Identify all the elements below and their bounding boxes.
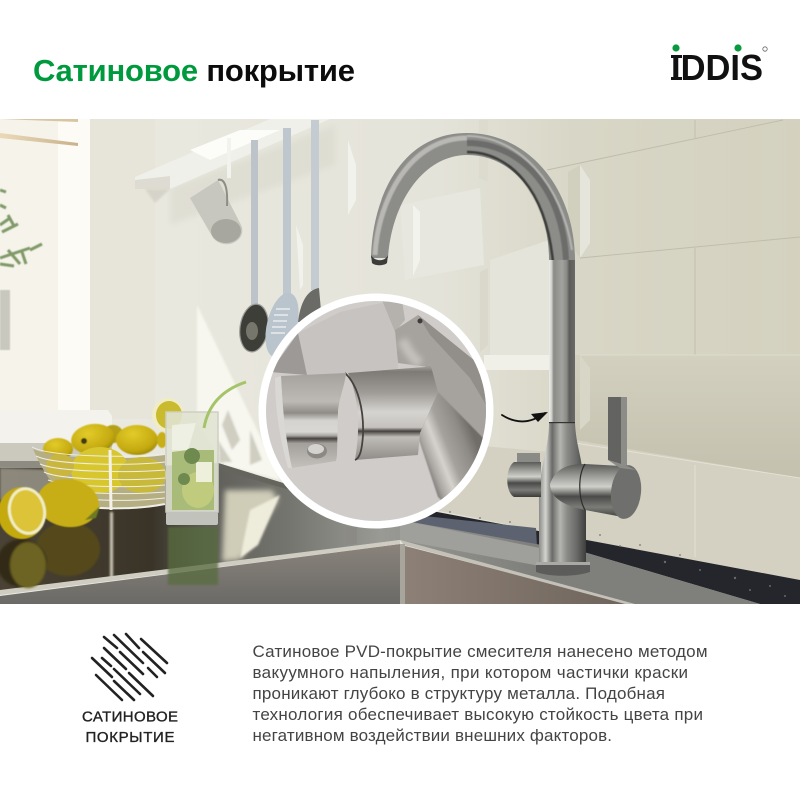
faucet lever handle: [550, 397, 644, 520]
rail: [135, 119, 335, 225]
faucet spout: [371, 133, 575, 425]
countertop: [0, 463, 760, 604]
lemons reflection: [0, 512, 218, 588]
logo: IDDIS: IDDIS: [671, 47, 763, 88]
description text: технология обеспечивает высокую стойкость цвета при: [252, 705, 703, 724]
tiles: left area: [296, 120, 549, 370]
title: Сатиновое покрытие: [33, 53, 355, 88]
description text: [252, 642, 708, 745]
glass of lemonade: [152, 382, 246, 525]
wall background: [0, 119, 800, 604]
description text: Сатиновое PVD-покрытие смесителя нанесено методом: [252, 642, 708, 661]
plant: [0, 190, 42, 350]
photo: kitchen scene: [0, 119, 800, 604]
icon: satin hatching: [92, 634, 167, 700]
description text: негативном воздействии внешних факторов.: [252, 726, 612, 745]
icon caption: ПОКРЫТИЕ: [86, 729, 174, 746]
spoon: [298, 120, 322, 322]
cap: [281, 373, 346, 468]
rivet: [307, 444, 327, 458]
icon caption: САТИНОВОЕ: [82, 708, 178, 726]
upper neck: [382, 300, 495, 500]
sink rim and walls: [0, 540, 635, 604]
mug: [190, 138, 242, 244]
basket with lemons: [32, 421, 167, 510]
body cylinder: [348, 364, 438, 460]
faucet side knob: [507, 453, 541, 497]
zoom circle: [258, 294, 495, 528]
icon caption: [82, 708, 178, 746]
skimmer: [266, 128, 298, 356]
tiles: right wall: [420, 120, 800, 582]
granite backsplash band: [400, 505, 800, 604]
sun patch on wall: [197, 305, 280, 480]
faucet body: [536, 422, 590, 576]
ring: [345, 373, 363, 460]
arrow: [502, 412, 548, 422]
circle background: [260, 300, 495, 525]
description text: проникают глубоко в структуру металла. Подобная: [252, 684, 665, 703]
sill: [0, 410, 112, 469]
front lemons: [0, 475, 102, 539]
ladle: [239, 140, 268, 352]
description text: вакуумного напыления, при котором частички краски: [252, 663, 688, 682]
window: [0, 119, 90, 410]
elbow pipe: [419, 392, 483, 500]
